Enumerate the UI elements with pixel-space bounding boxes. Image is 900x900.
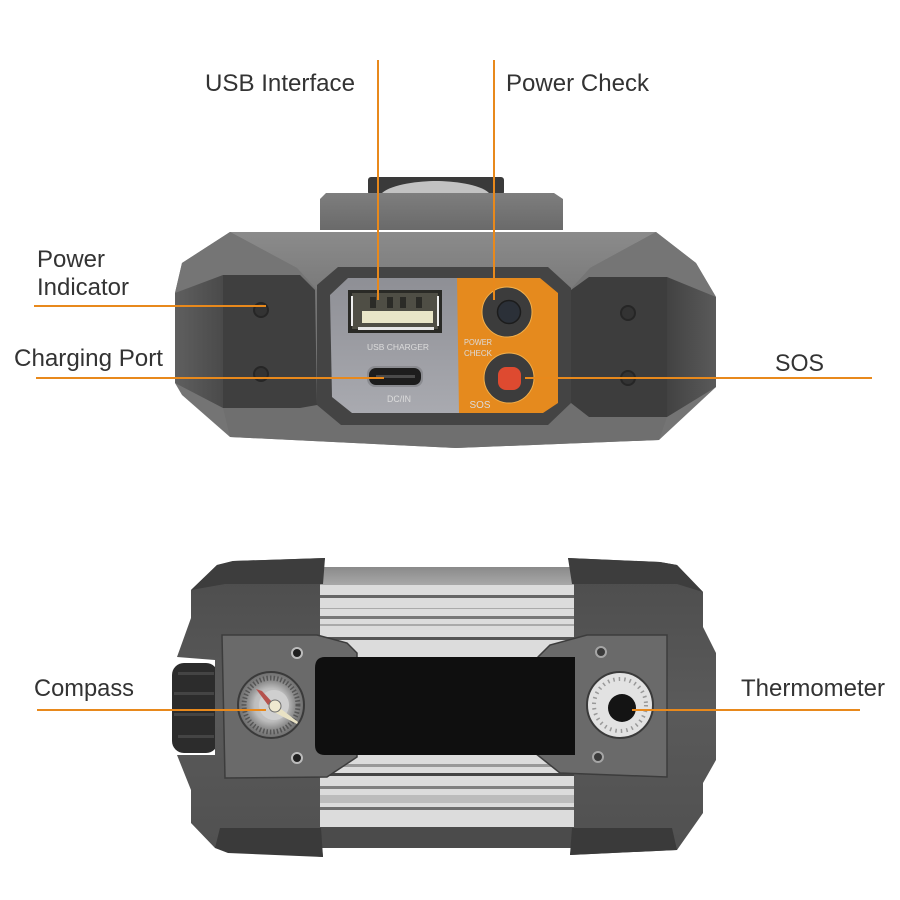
line: compass	[37, 709, 266, 711]
left dark panel	[223, 275, 317, 408]
right bracket	[535, 635, 667, 777]
icon: left indicator screws	[254, 303, 268, 381]
right dark panel	[571, 277, 667, 417]
device: top view	[175, 177, 716, 448]
icon: left bracket screws	[292, 648, 302, 763]
right upper facet	[571, 232, 716, 297]
text: POWER CHECK: CHECK	[464, 349, 493, 358]
left side faces	[175, 275, 223, 408]
icon: right indicator screws	[621, 306, 635, 385]
label: Power Indicator: Indicator	[37, 274, 129, 301]
top band facet	[230, 232, 656, 290]
icon: compass	[238, 672, 304, 738]
label: USB Interface: USB Interface	[205, 70, 355, 97]
icon: thermometer	[587, 672, 653, 738]
panel: orange plate	[457, 278, 558, 413]
text: USB CHARGER: USB CHARGER	[367, 342, 429, 352]
strap	[315, 657, 575, 755]
label: Thermometer: Thermometer	[741, 675, 885, 702]
line: USB interface	[377, 60, 379, 300]
line: charging port	[36, 377, 384, 379]
text: SOS: SOS	[470, 400, 491, 411]
left rubber cap	[177, 558, 325, 857]
label: Power Indicator	[37, 246, 129, 301]
device: bottom view	[172, 558, 716, 857]
label: Power Indicator: Power	[37, 246, 105, 273]
line: thermometer	[632, 709, 860, 711]
label: SOS: SOS	[775, 350, 824, 377]
icon: right bracket screws	[593, 647, 606, 762]
text: DC/IN: DC/IN	[387, 394, 411, 404]
panel: gray plate	[330, 278, 459, 413]
control frame	[317, 267, 571, 425]
text: POWER CHECK: POWER	[464, 338, 492, 347]
line: power check	[493, 60, 495, 300]
left bracket	[222, 635, 357, 778]
body	[175, 232, 716, 448]
icon: SOS button	[484, 353, 534, 403]
icon: micro USB port	[367, 366, 423, 387]
label: Compass: Compass	[34, 675, 134, 702]
left upper facet	[175, 232, 317, 295]
lower facet	[223, 403, 667, 448]
line: SOS	[525, 377, 872, 379]
label: Power Check: Power Check	[506, 70, 650, 97]
icon: power check button	[482, 287, 532, 337]
aluminum body	[318, 567, 576, 848]
line: power indicator	[34, 305, 266, 307]
label: Charging Port: Charging Port	[14, 345, 163, 372]
right rubber cap	[568, 558, 716, 855]
icon: side knob	[172, 663, 218, 753]
icon: USB port	[348, 290, 442, 333]
right side faces	[667, 277, 716, 417]
mount block	[320, 193, 563, 230]
strap behind mount	[368, 177, 504, 195]
text: POWER CHECK	[464, 338, 493, 358]
callout lines	[34, 60, 872, 710]
